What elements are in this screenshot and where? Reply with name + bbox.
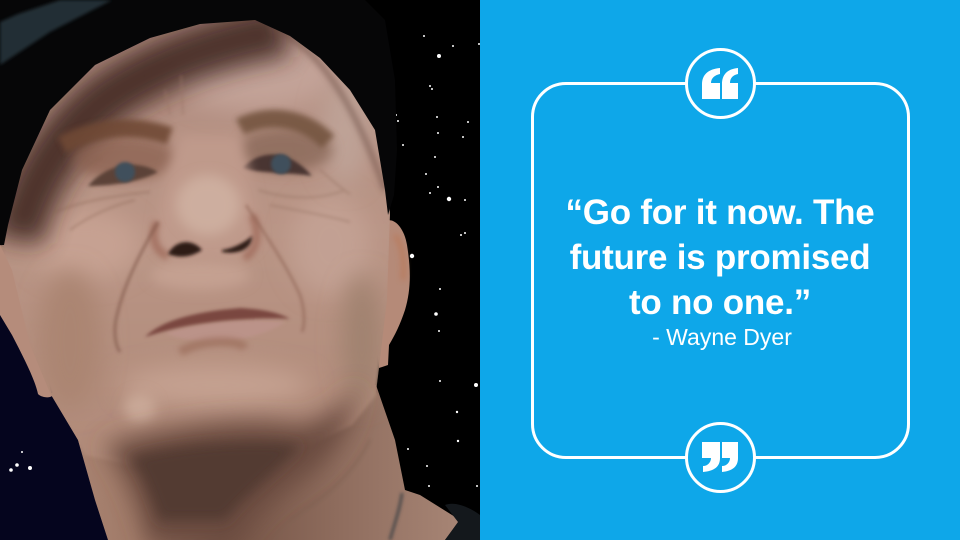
- head: [0, 0, 400, 540]
- beard shadow under chin: [105, 385, 358, 540]
- mouth: [145, 308, 290, 337]
- icon: opening quotation mark badge: [685, 48, 756, 119]
- nasolabial creases: [115, 222, 158, 352]
- attribution: - Wayne Dyer: [652, 324, 792, 350]
- under-eye wrinkles: [69, 192, 148, 230]
- shirt: [445, 504, 480, 540]
- stars: [9, 35, 480, 487]
- right eye: [242, 155, 312, 176]
- left ear: [0, 245, 52, 397]
- icon: closing quotation mark badge: [685, 422, 756, 493]
- quote text: [566, 193, 874, 322]
- eye sockets: [73, 136, 177, 180]
- right eyebrow: [240, 119, 328, 142]
- left eyebrow: [62, 128, 170, 145]
- lower lip and chin fold: [173, 322, 276, 338]
- quote text: future is promised: [570, 238, 870, 277]
- right ear: [372, 220, 410, 368]
- quote card outline: [531, 82, 910, 459]
- nostrils: [168, 242, 202, 257]
- quote text: “Go for it now. The: [566, 193, 874, 232]
- blue quote panel: [480, 0, 960, 540]
- left eye: [88, 165, 158, 186]
- quote text: to no one.”: [629, 283, 811, 322]
- forehead shadow under cap: [18, 30, 285, 240]
- photo: portrait of Wayne Dyer against starry sky: [0, 0, 480, 540]
- forehead creases: [180, 76, 182, 82]
- neck: [40, 380, 470, 540]
- hat highlight band: [0, 0, 112, 65]
- nose: [165, 138, 256, 182]
- cap: [0, 0, 397, 245]
- navy sky at bottom left: [0, 300, 110, 540]
